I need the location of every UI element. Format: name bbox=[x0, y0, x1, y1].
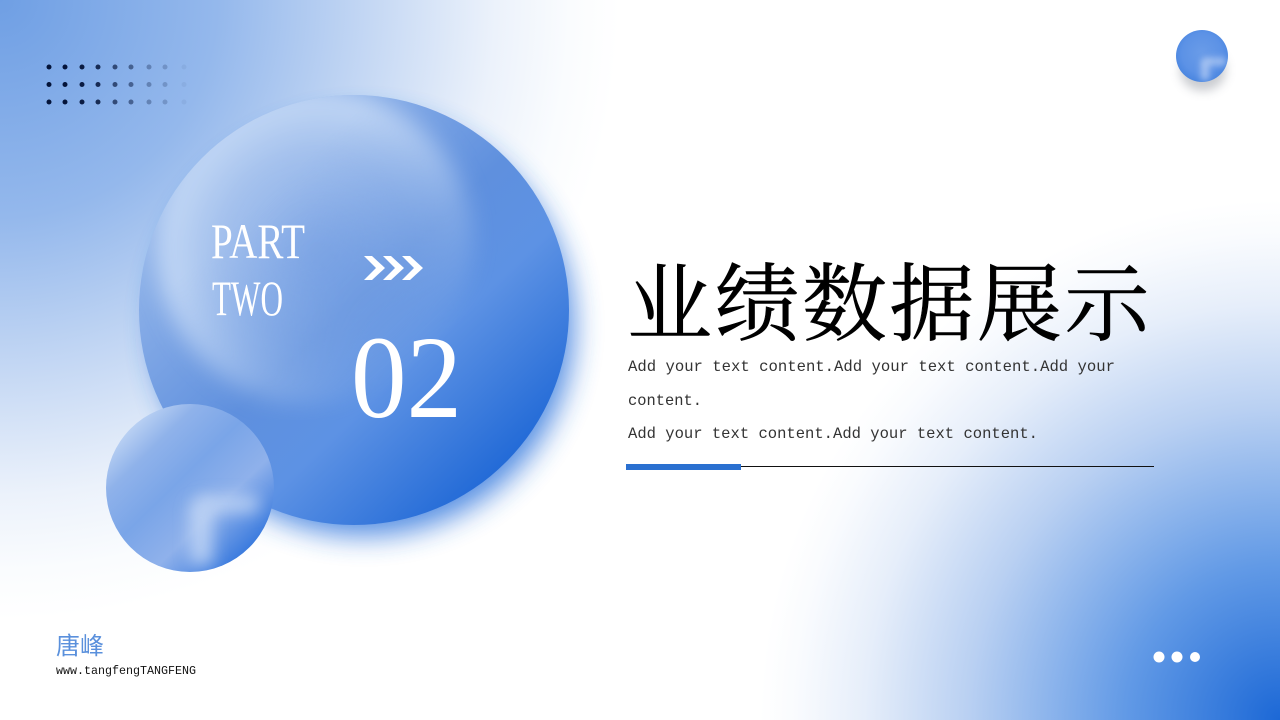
logo name: 唐峰 bbox=[56, 626, 104, 661]
dot matrix decoration bbox=[46, 64, 186, 104]
website text: www.tangfengTANGFENG bbox=[56, 664, 196, 678]
large sphere bbox=[139, 80, 574, 536]
three white dots bbox=[1154, 652, 1200, 662]
body text: Add your text content.Add your text content. bbox=[628, 425, 1038, 443]
part label: TWO bbox=[212, 270, 283, 326]
background: top-left blue glow bbox=[0, 0, 640, 640]
section number: 02 bbox=[351, 312, 462, 443]
body text bbox=[628, 358, 1115, 443]
part label bbox=[211, 213, 305, 326]
small sphere bbox=[106, 404, 274, 572]
divider with accent bbox=[626, 464, 1154, 470]
small top-right sphere bbox=[1176, 30, 1228, 91]
part label: PART bbox=[211, 213, 305, 269]
body text: Add your text content.Add your text content.Add your bbox=[628, 358, 1115, 376]
icon: triple chevron arrows bbox=[364, 256, 423, 280]
background: bottom-right blue glow bbox=[740, 190, 1280, 720]
main title: 业绩数据展示 bbox=[627, 237, 1152, 359]
body text: content. bbox=[628, 392, 702, 410]
